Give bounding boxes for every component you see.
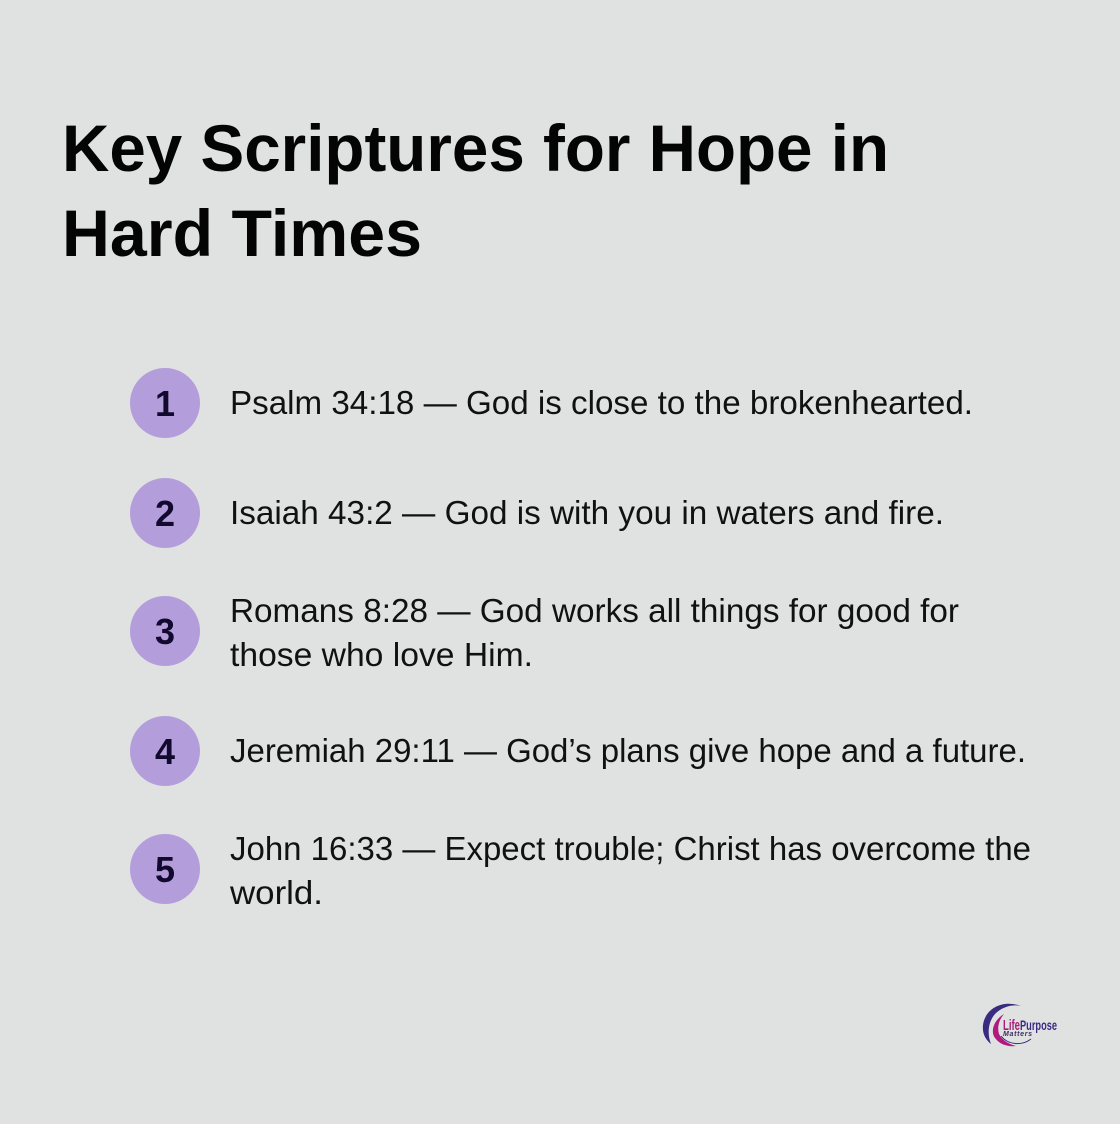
scripture text 1: Psalm 34:18 — God is close to the brokenhearted.: [230, 384, 973, 421]
number badge 4: [130, 716, 200, 786]
logo: Life Purpose Matters: Matters: [1003, 1031, 1032, 1038]
title: Key Scriptures for Hope in: [62, 111, 889, 185]
number badge 3: 3: [155, 611, 175, 652]
logo: Life Purpose Matters: Life: [1003, 1017, 1020, 1034]
list item 2: [130, 478, 944, 548]
list item 3: [130, 592, 959, 673]
number badge 1: 1: [155, 383, 175, 424]
number badge 4: 4: [155, 731, 175, 772]
logo: Life Purpose Matters: [983, 1004, 1057, 1046]
title: Hard Times: [62, 196, 422, 270]
number badge 5: 5: [155, 849, 175, 890]
scripture text 3: Romans 8:28 — God works all things for good for: [230, 592, 959, 629]
list item 4: [130, 716, 1026, 786]
scripture text 4: Jeremiah 29:11 — God’s plans give hope and a future.: [230, 732, 1026, 769]
number badge 2: [130, 478, 200, 548]
number badge 3: [130, 596, 200, 666]
scripture text 3: those who love Him.: [230, 636, 533, 673]
number badge 5: [130, 834, 200, 904]
logo: Life Purpose Matters: Purpose: [1020, 1017, 1057, 1033]
scripture text 5: John 16:33 — Expect trouble; Christ has overcome the: [230, 830, 1031, 867]
number badge 1: [130, 368, 200, 438]
title: [62, 111, 889, 270]
scripture text 3: [230, 592, 959, 673]
scripture text 2: Isaiah 43:2 — God is with you in waters and fire.: [230, 494, 944, 531]
list item 1: [130, 368, 973, 438]
list item 5: [130, 830, 1031, 911]
number badge 2: 2: [155, 493, 175, 534]
scripture text 5: [229, 830, 1031, 911]
scripture text 5: world.: [229, 874, 323, 911]
